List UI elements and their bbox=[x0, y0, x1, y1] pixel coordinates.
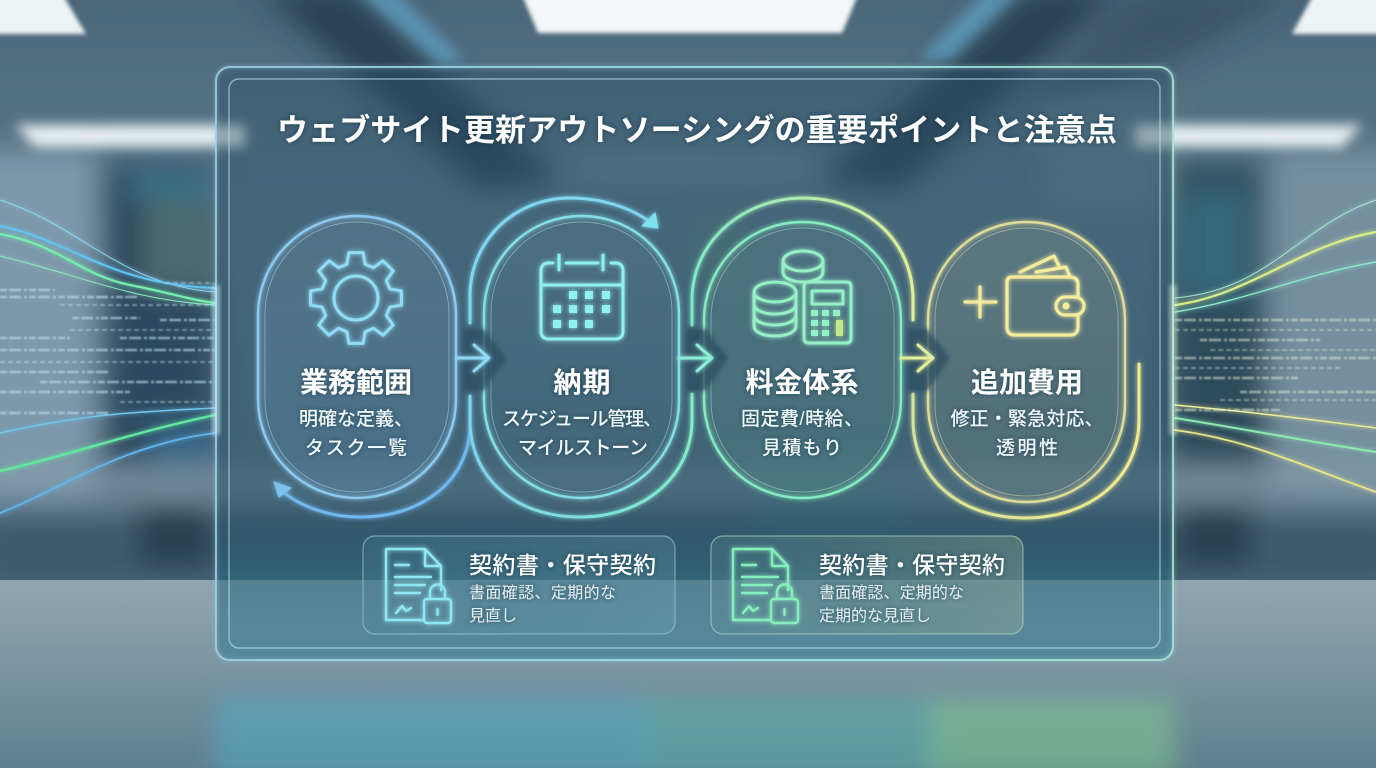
card 2 text bbox=[819, 552, 1005, 625]
step 2 text: マイルストーン bbox=[518, 438, 648, 459]
data flow lines right bbox=[1175, 200, 1376, 492]
step 1 text: 明確な定義、 bbox=[299, 408, 413, 430]
arrow 3 bbox=[901, 345, 933, 371]
glass panel bbox=[212, 67, 1177, 660]
card 2 text: 契約書・保守契約 bbox=[819, 552, 1005, 578]
step 1 text bbox=[299, 367, 413, 459]
icon: gear bbox=[311, 253, 401, 343]
data flow lines left bbox=[0, 200, 215, 513]
card 2 text: 定期的な見直し bbox=[819, 607, 931, 625]
connecting loop arcs bbox=[274, 198, 1139, 518]
step 1: 業務範囲 bbox=[258, 216, 456, 498]
card: contract 1 bbox=[363, 536, 675, 634]
step 2 text bbox=[502, 367, 662, 459]
step 3 text bbox=[741, 367, 863, 459]
step 4 text: 透明性 bbox=[996, 437, 1058, 459]
icon: document with lock bbox=[386, 549, 451, 623]
step 1 text: タスク一覧 bbox=[305, 437, 407, 459]
step 3 text: 固定費/時給、 bbox=[741, 408, 863, 430]
title: ウェブサイト更新アウトソーシングの重要ポイントと注意点 bbox=[277, 113, 1117, 148]
icon: plus and wallet bbox=[965, 256, 1084, 335]
icon: calendar bbox=[541, 255, 623, 339]
card: contract 2 bbox=[711, 536, 1023, 634]
step 3 text: 見積もり bbox=[762, 437, 842, 459]
step 4 text: 修正・緊急対応、 bbox=[950, 408, 1104, 430]
card 1 text: 見直し bbox=[469, 607, 517, 625]
step 2 text: スケジュール管理、 bbox=[502, 408, 662, 430]
chevron notches bbox=[463, 329, 950, 391]
step 3 text: 料金体系 bbox=[746, 367, 858, 398]
icon: document with lock green bbox=[733, 549, 798, 623]
card 2 text: 書面確認、定期的な bbox=[819, 584, 964, 602]
card 1 text bbox=[469, 552, 656, 625]
step 2 text: 納期 bbox=[554, 367, 610, 398]
step 2: 納期 bbox=[484, 216, 679, 498]
arrow 2 bbox=[679, 345, 712, 371]
step 4 text: 追加費用 bbox=[971, 367, 1083, 398]
step 4 text bbox=[950, 367, 1104, 459]
arrow 1 bbox=[457, 345, 489, 371]
card 1 text: 書面確認、定期的な bbox=[469, 584, 616, 602]
step 4: 追加費用 bbox=[928, 222, 1125, 502]
card 1 text: 契約書・保守契約 bbox=[469, 552, 656, 578]
step 3: 料金体系 bbox=[704, 222, 901, 498]
step 1 text: 業務範囲 bbox=[300, 367, 412, 398]
icon: coins and calculator bbox=[754, 251, 851, 343]
